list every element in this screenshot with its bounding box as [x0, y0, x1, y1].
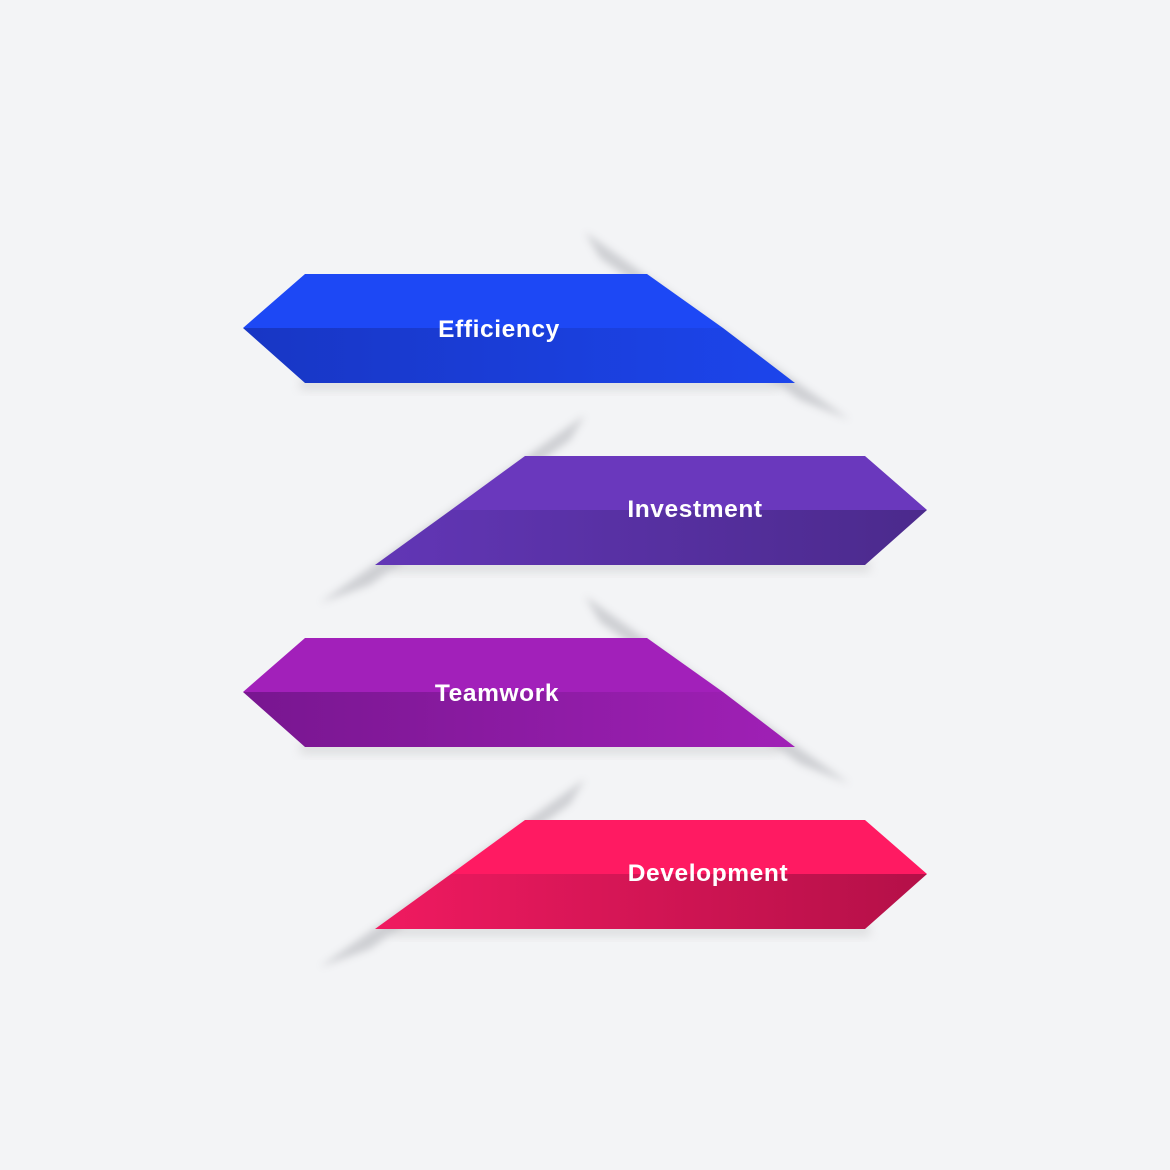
label: Teamwork: Teamwork [435, 680, 559, 707]
banner: Investment [320, 415, 927, 603]
banner: Efficiency [243, 232, 850, 420]
banner: Development [320, 779, 927, 967]
banner: Teamwork [243, 596, 850, 784]
label: Development: Development [628, 860, 788, 887]
label: Efficiency: Efficiency [438, 316, 560, 343]
label: Investment: Investment [627, 496, 763, 523]
